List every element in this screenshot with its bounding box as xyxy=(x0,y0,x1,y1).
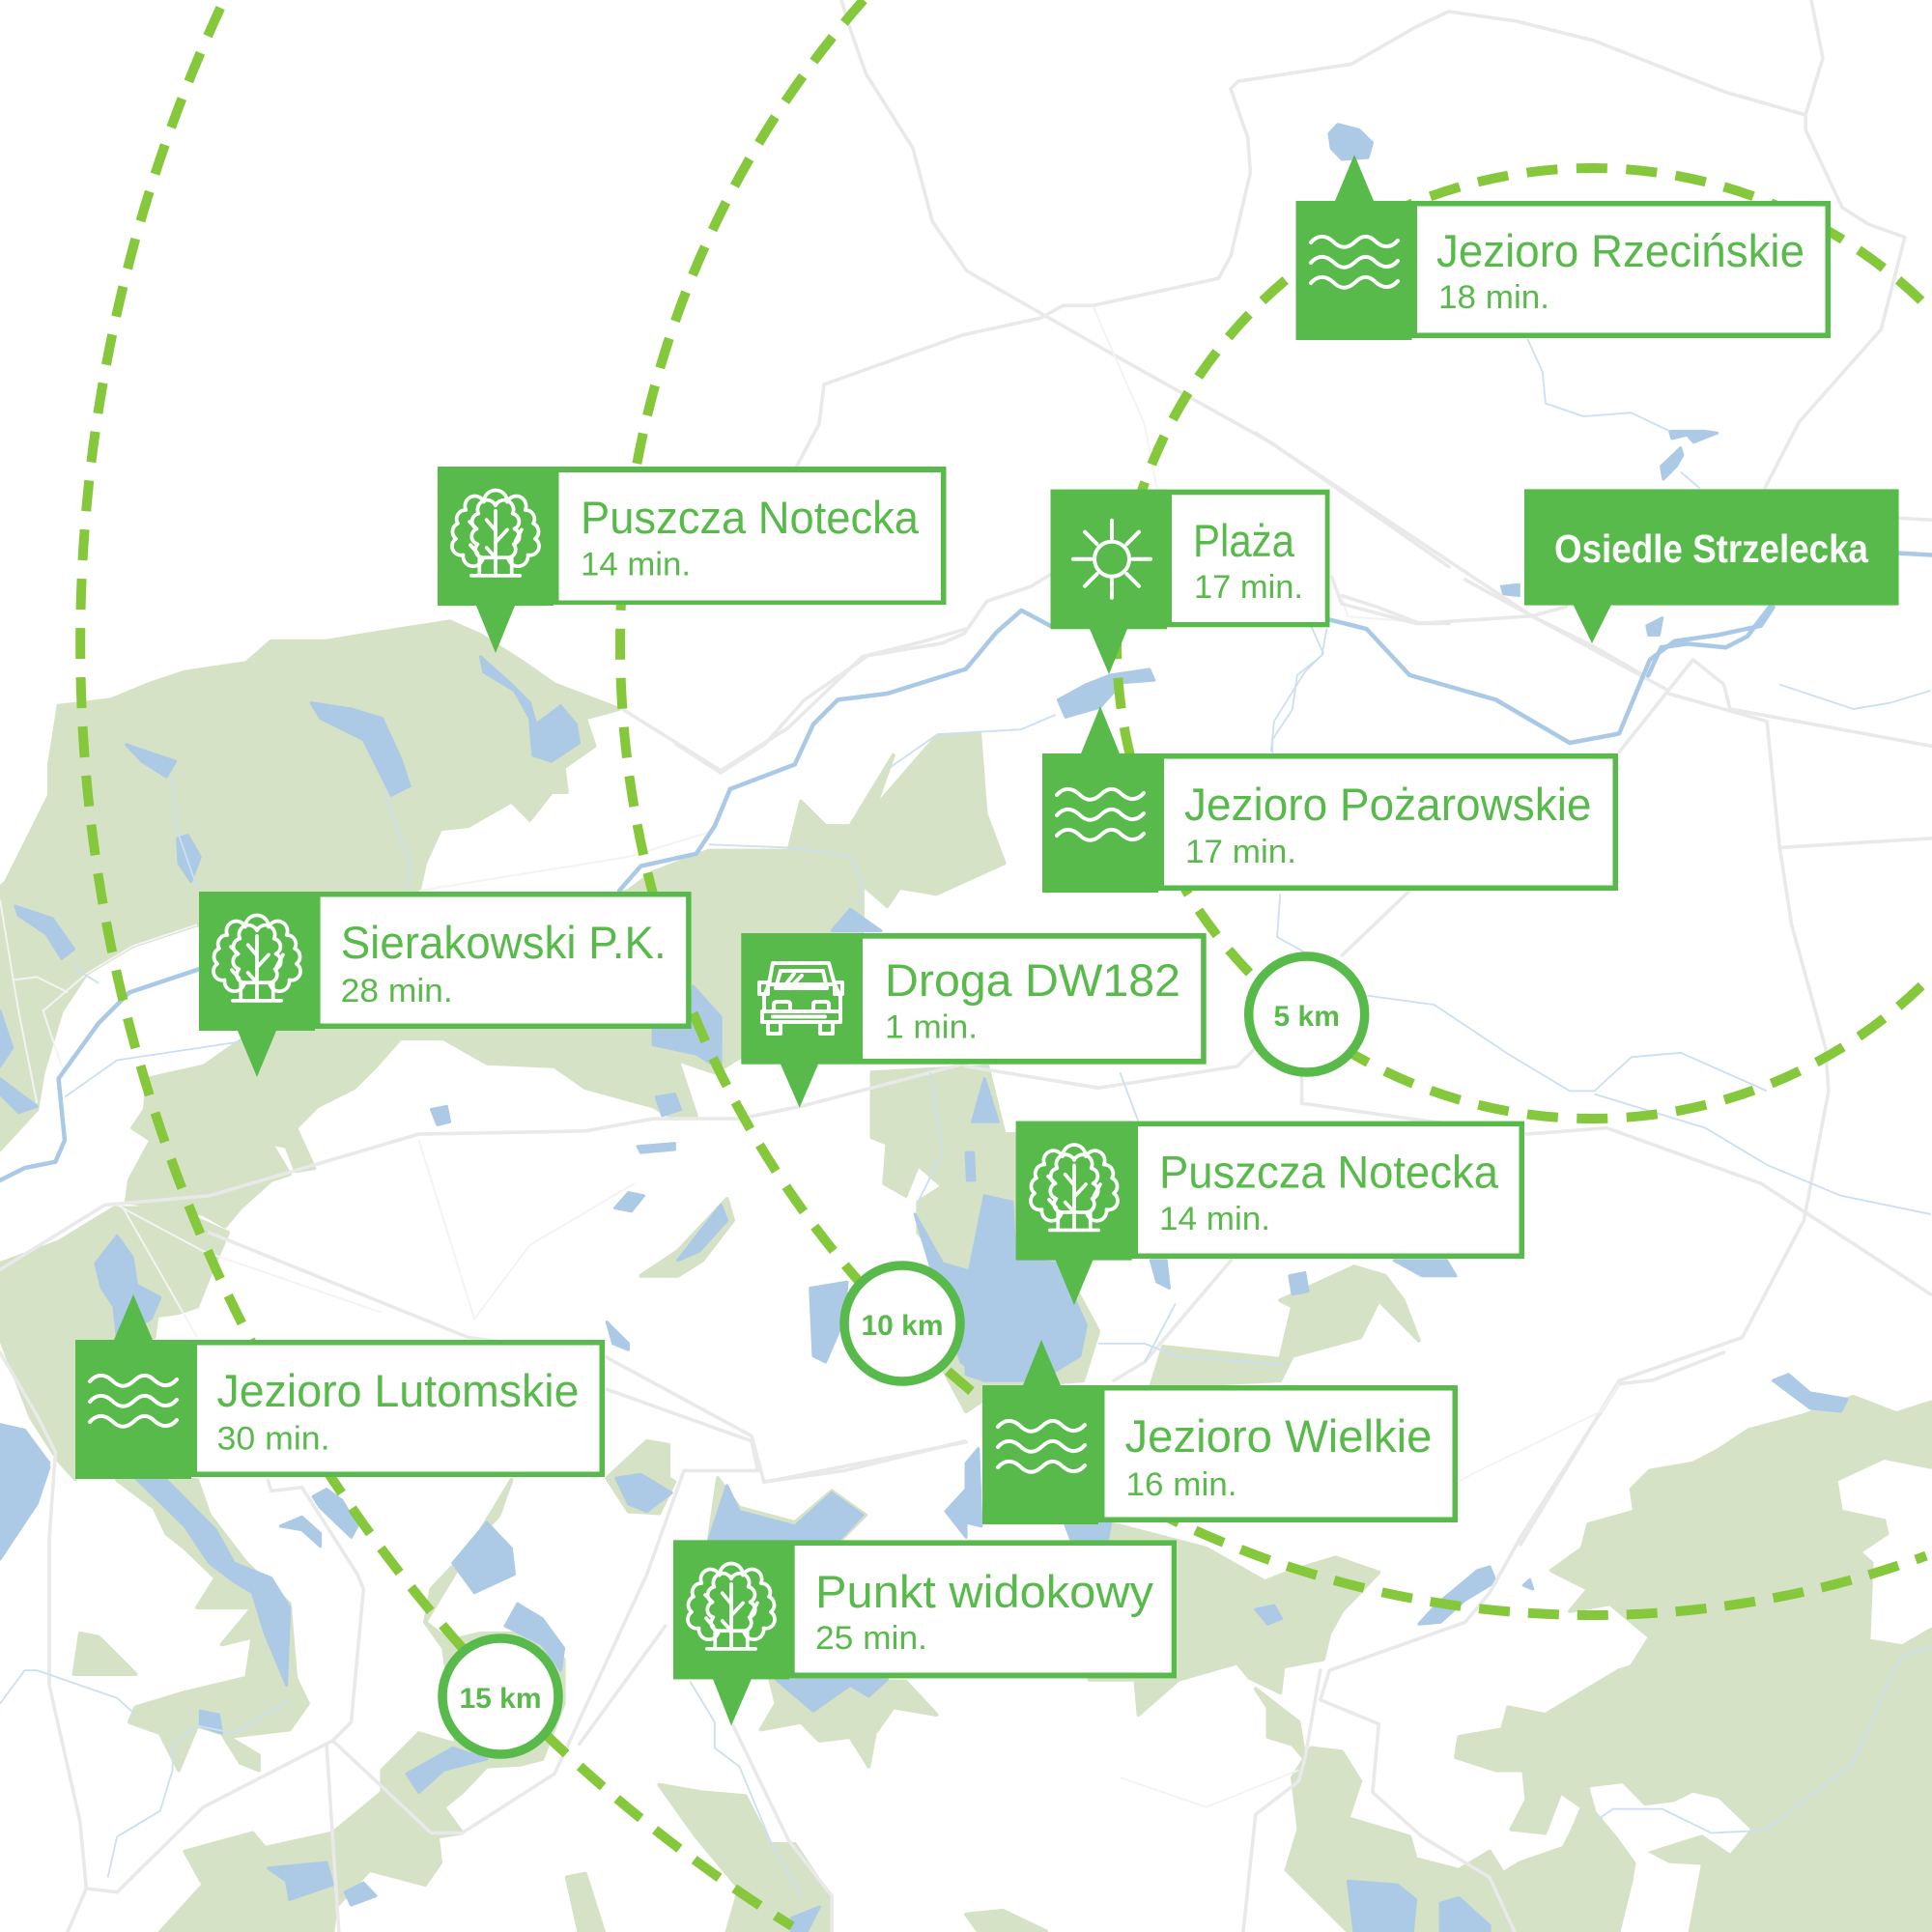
name: Plaża xyxy=(1193,515,1295,566)
time: 30 min. xyxy=(216,1420,330,1457)
card: Sierakowski P.K. xyxy=(199,892,692,1077)
icon: tree xyxy=(213,916,300,1001)
time: 1 min. xyxy=(885,1009,978,1045)
distance badge: 5 km xyxy=(1249,956,1365,1072)
icon panel xyxy=(1051,490,1167,629)
name: Osiedle Strzelecka xyxy=(1554,526,1869,571)
time: 25 min. xyxy=(815,1620,927,1657)
card: Osiedle Strzelecka xyxy=(1524,489,1899,643)
icon: waves xyxy=(1057,789,1144,840)
frame xyxy=(199,892,692,1029)
card: Puszcza Notecka north xyxy=(438,467,947,653)
text box xyxy=(1172,495,1325,622)
icon panel xyxy=(75,1340,191,1479)
time: 14 min. xyxy=(581,547,691,583)
icon panel xyxy=(982,1385,1098,1524)
icon: tree xyxy=(452,491,539,576)
icon: car xyxy=(759,963,842,1034)
icon panel xyxy=(1016,1122,1132,1261)
name: Sierakowski P.K. xyxy=(341,917,667,968)
name: Puszcza Notecka xyxy=(581,492,920,543)
card: Jezioro Pożarowskie xyxy=(1042,706,1618,893)
card: Jezioro Lutomskie xyxy=(75,1294,605,1479)
card: Plaża xyxy=(1051,490,1329,674)
pointer xyxy=(476,606,515,653)
text box xyxy=(1164,759,1613,885)
pointer xyxy=(1090,629,1127,674)
frame xyxy=(1016,1122,1524,1259)
text box xyxy=(1417,207,1826,332)
pointer xyxy=(713,1679,752,1725)
frame xyxy=(438,467,947,605)
text box xyxy=(1138,1126,1519,1254)
icon panel xyxy=(673,1540,789,1679)
text box xyxy=(1105,1391,1453,1517)
icon panel xyxy=(199,892,315,1031)
distance badge: 10 km xyxy=(844,1265,960,1381)
panel xyxy=(1524,489,1899,606)
pointer xyxy=(1335,155,1374,201)
icon: sun xyxy=(1073,521,1151,598)
frame xyxy=(741,933,1207,1065)
name: Droga DW182 xyxy=(885,954,1180,1006)
pointer xyxy=(1573,605,1611,643)
text box xyxy=(863,939,1201,1059)
icon: waves xyxy=(998,1421,1085,1472)
frame xyxy=(1051,490,1329,627)
pointer xyxy=(1081,706,1120,753)
time: 14 min. xyxy=(1159,1201,1270,1237)
icon: waves xyxy=(1311,237,1398,288)
frame xyxy=(1042,753,1618,891)
distance badge: 10 km: 10 km xyxy=(861,1310,944,1342)
distance badge: 5 km: 5 km xyxy=(1274,1001,1340,1033)
text box xyxy=(321,896,686,1024)
name: Jezioro Lutomskie xyxy=(216,1365,580,1416)
name: Jezioro Wielkie xyxy=(1124,1410,1432,1462)
card: Punkt widokowy xyxy=(673,1540,1177,1725)
text box xyxy=(197,1345,599,1472)
text box xyxy=(558,472,941,601)
map: forests xyxy=(0,621,1931,1932)
pointer xyxy=(1055,1259,1094,1305)
icon panel xyxy=(1042,753,1158,893)
pointer xyxy=(238,1031,276,1077)
dashed range ring: 10 km xyxy=(620,0,1926,1615)
card: Droga DW182 xyxy=(741,933,1207,1108)
frame xyxy=(982,1385,1458,1522)
icon: tree xyxy=(1031,1145,1118,1230)
distance badge: 15 km: 15 km xyxy=(459,1683,542,1715)
time: 17 min. xyxy=(1185,834,1296,870)
dashed range ring: 5 km xyxy=(1117,168,1926,1119)
name: Puszcza Notecka xyxy=(1159,1146,1499,1198)
frame xyxy=(1296,201,1831,338)
card: Jezioro Rzecińskie xyxy=(1296,155,1831,340)
name: Jezioro Pożarowskie xyxy=(1184,779,1592,830)
icon: waves xyxy=(90,1376,177,1427)
pointer xyxy=(1023,1340,1061,1385)
icon panel xyxy=(438,467,554,606)
card: Puszcza Notecka south xyxy=(1016,1122,1524,1305)
distance badge: 15 km xyxy=(442,1638,558,1754)
pointer xyxy=(114,1294,153,1340)
icon panel xyxy=(1296,201,1412,340)
frame xyxy=(75,1340,605,1477)
text box xyxy=(795,1546,1172,1673)
time: 17 min. xyxy=(1194,569,1303,606)
name: Punkt widokowy xyxy=(815,1566,1154,1617)
time: 28 min. xyxy=(341,973,453,1009)
name: Jezioro Rzecińskie xyxy=(1436,225,1804,276)
time: 16 min. xyxy=(1126,1466,1236,1503)
frame xyxy=(673,1540,1177,1678)
icon: tree xyxy=(688,1564,775,1649)
card: Jezioro Wielkie xyxy=(982,1340,1458,1524)
time: 18 min. xyxy=(1438,279,1549,316)
pointer xyxy=(781,1064,818,1108)
dashed range ring: 15 km xyxy=(80,0,792,1926)
